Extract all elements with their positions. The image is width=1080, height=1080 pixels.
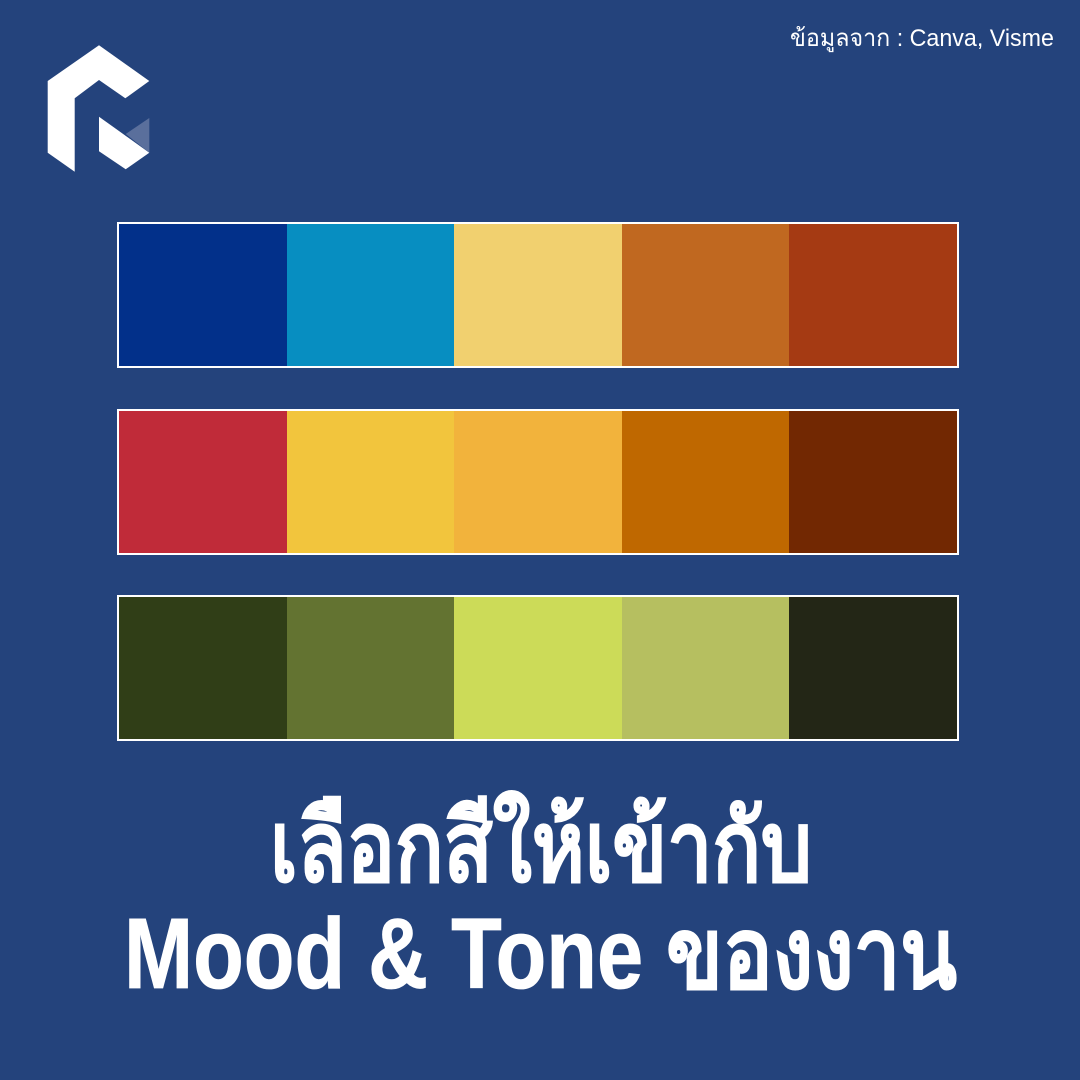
palette 1: blue to rust: [117, 222, 959, 368]
source credit: ข้อมูลจาก : Canva, Visme: [790, 25, 1054, 53]
swatch: rust: [789, 224, 957, 366]
swatch: sand yellow: [454, 224, 622, 366]
swatch: pale olive: [622, 597, 789, 739]
swatch: near black olive: [789, 597, 957, 739]
swatch: ochre: [622, 224, 789, 366]
swatch: dark orange: [622, 411, 789, 553]
logo: [48, 45, 150, 172]
swatch: moss: [287, 597, 454, 739]
logo mark: lower wedge: [99, 117, 149, 169]
title line 1: เลือกสีให้เข้ากับ: [270, 790, 812, 902]
palette 2: red to brown: [117, 409, 959, 555]
swatch: crimson: [119, 411, 287, 553]
swatch: amber: [454, 411, 622, 553]
swatch: dark olive: [119, 597, 287, 739]
palette 3: olive greens: [117, 595, 959, 741]
swatch: golden yellow: [287, 411, 454, 553]
title: [124, 790, 957, 1010]
swatch: brown: [789, 411, 957, 553]
logo mark: translucent wedge: [126, 118, 149, 153]
swatch: navy: [119, 224, 287, 366]
swatch: lime: [454, 597, 622, 739]
logo mark: upper chevron: [48, 45, 149, 172]
swatch: cyan blue: [287, 224, 454, 366]
